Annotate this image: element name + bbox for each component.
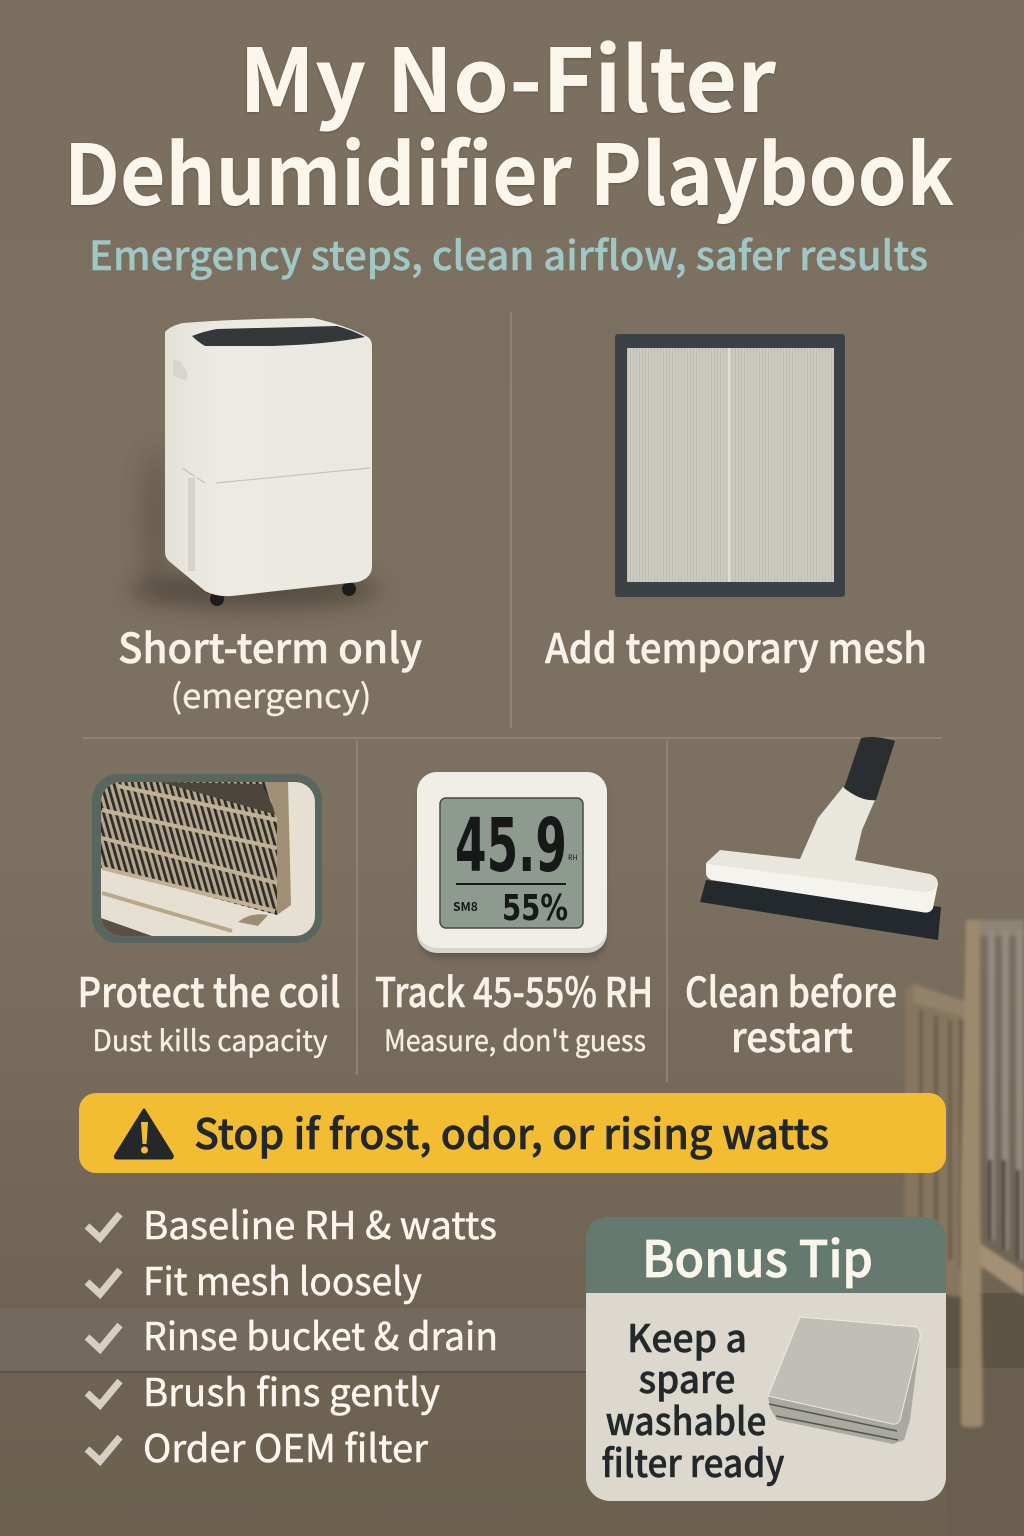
label: short-term only: Short-term only <box>118 615 422 675</box>
icon: warning triangle <box>115 1110 172 1158</box>
sublabel: measure: Measure, don't guess <box>384 1018 646 1060</box>
bonus text: filter ready <box>602 1433 785 1488</box>
panel: track RH <box>375 772 653 1060</box>
bonus heading: Bonus Tip <box>642 1220 873 1292</box>
icon: hygrometer <box>417 772 607 958</box>
bonus text: spare <box>638 1349 736 1404</box>
item: order: Order OEM filter <box>143 1418 428 1473</box>
bonus text: Keep a <box>627 1308 747 1363</box>
icon: hygrometer: 45.9 <box>455 803 567 889</box>
icon: dusty coil <box>92 774 322 943</box>
panel: add temporary mesh <box>545 334 927 675</box>
panel: clean before restart <box>685 737 941 1064</box>
label: clean before restart: Clean before <box>685 959 897 1019</box>
icon: hygrometer: 55% <box>502 888 568 929</box>
warning banner <box>79 1093 946 1173</box>
crib in background <box>905 920 1024 1428</box>
label: restart: restart <box>731 1004 853 1064</box>
floor behind crib <box>946 1293 1024 1536</box>
item: fit mesh: Fit mesh loosely <box>143 1251 422 1306</box>
icon: folded filter stack <box>768 1317 920 1444</box>
panel: short-term only <box>118 318 422 718</box>
item: brush: Brush fins gently <box>143 1362 440 1417</box>
banner text: Stop if frost, odor, or rising watts <box>194 1101 829 1162</box>
label: track RH: Track 45-55% RH <box>375 959 653 1019</box>
floor <box>946 1368 1024 1536</box>
icon: hygrometer: SM8 <box>453 898 478 915</box>
panel: bonus tip <box>586 1217 946 1501</box>
bonus text: washable <box>606 1391 766 1446</box>
icon: dehumidifier <box>130 318 380 608</box>
title <box>64 11 954 230</box>
sublabel: dust kills capacity: Dust kills capacity <box>92 1018 328 1060</box>
icon: brush nozzle <box>700 737 941 940</box>
panel: protect the coil <box>78 774 340 1060</box>
item: baseline: Baseline RH & watts <box>143 1195 497 1250</box>
skirting board band <box>0 1308 590 1373</box>
label: protect the coil: Protect the coil <box>78 959 340 1019</box>
sublabel: emergency: (emergency) <box>170 670 372 718</box>
item: rinse: Rinse bucket & drain <box>143 1306 498 1361</box>
label: add temporary mesh: Add temporary mesh <box>545 615 927 675</box>
title: Dehumidifier Playbook <box>64 109 954 230</box>
title: My No-Filter <box>239 11 777 138</box>
subtitle: Emergency steps, clean airflow, safer results <box>89 224 928 282</box>
bonus text <box>602 1308 785 1488</box>
checklist <box>87 1195 498 1473</box>
icon: hygrometer: RH <box>568 853 578 863</box>
icon: mesh filter <box>615 334 845 597</box>
